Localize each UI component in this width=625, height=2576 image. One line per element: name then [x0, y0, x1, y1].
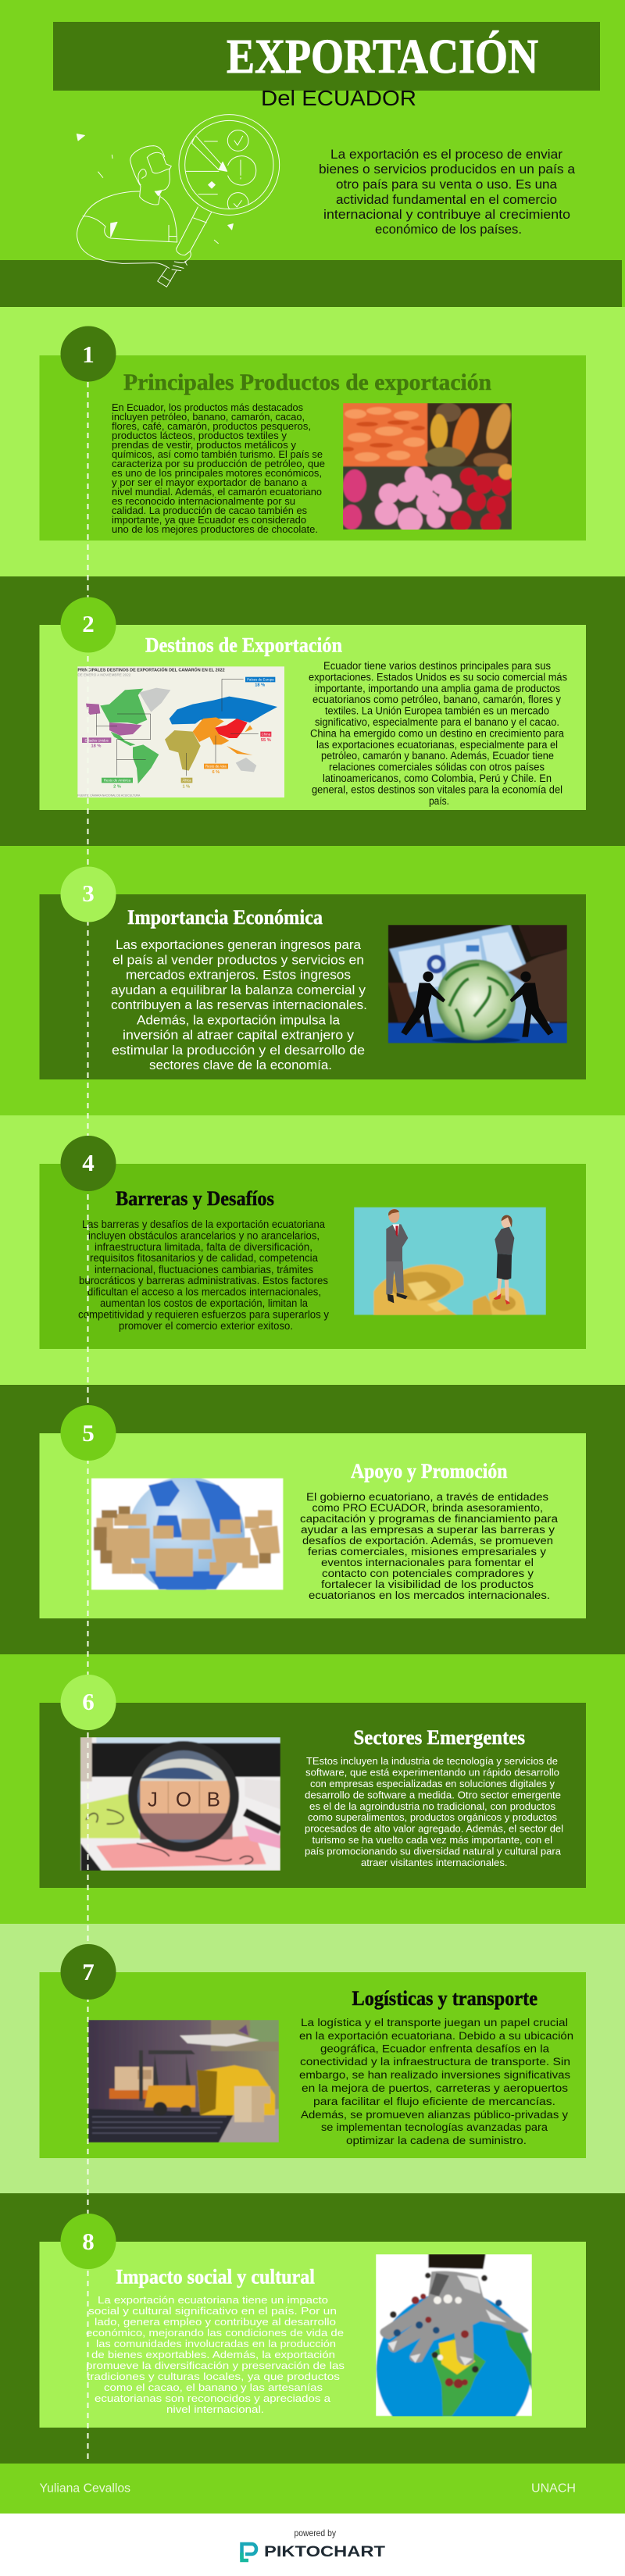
- body text 7: en la exportación ecuatoriana. Debido a su ubicación: [299, 2030, 573, 2042]
- body text 6: procesados de alto valor agregado. Además, el sector del: [305, 1823, 563, 1835]
- section 8 content: [86, 2254, 532, 2417]
- map: main export destinations: 18 %: [255, 683, 265, 688]
- background band: section 4: [0, 1115, 625, 1385]
- body text 6: país promocionando su diversidad natural y cultural para: [305, 1845, 562, 1857]
- body text 5: fortalecer la visibilidad de los productos: [321, 1579, 534, 1590]
- body text 3: inversión al atraer capital extranjero y: [123, 1029, 355, 1043]
- heading 7: Logísticas y transporte: [352, 1987, 538, 2010]
- section 2 content: [77, 634, 567, 807]
- body text 4: [78, 1218, 329, 1332]
- map: main export destinations: China: [262, 733, 271, 737]
- body text 2: significativo, especialmente para el banano y el cacao.: [315, 716, 559, 728]
- map: main export destinations: Resto de Asia: [205, 765, 227, 769]
- body text 5: eventos internacionales para fomentar el: [321, 1557, 534, 1568]
- body text 7: [299, 2017, 573, 2146]
- section 7 content: [88, 1987, 573, 2146]
- heading 3: Importancia Económica: [127, 906, 323, 929]
- body text 8: económico, mejorando las condiciones de vida de: [86, 2327, 344, 2339]
- panel 7: [39, 1972, 586, 2158]
- map: main export destinations: 2 %: [113, 784, 121, 789]
- image: globe with cardboard boxes: [91, 1476, 284, 1593]
- body text 7: Además, se promueven alianzas público-privadas y: [301, 2109, 568, 2121]
- body text 5: [300, 1491, 559, 1601]
- body text 8: social y cultural significativo en el país. Por un: [88, 2305, 337, 2317]
- body text 3: mercados extranjeros. Estos ingresos: [126, 969, 351, 983]
- badge 6: 6: [82, 1688, 95, 1715]
- body text 4: internacional, fluctuaciones cambiarias, trámites: [95, 1264, 313, 1276]
- body text 4: aumentan los costos de exportación, limitan la: [100, 1297, 308, 1309]
- body text 6: turismo se ha vuelto cada vez más importante, con el: [312, 1834, 552, 1846]
- body text 3: el país al vender productos y servicios en: [112, 953, 364, 967]
- body text 3: Las exportaciones generan ingresos para: [116, 938, 362, 952]
- heading 2: Destinos de Exportación: [145, 634, 342, 656]
- intro text: otro país para su venta o uso. Es una: [336, 177, 558, 192]
- footer institution: UNACH: [531, 2482, 576, 2495]
- background band: section 3: [0, 846, 625, 1115]
- body text 8: tradiciones y culturas locales, ya que productos: [87, 2371, 341, 2382]
- body text 2: latinoamericanos, como Colombia, Perú y Chile. En: [323, 772, 552, 784]
- title: EXPORTACIÓN: [227, 30, 538, 84]
- badge 8: 8: [82, 2228, 95, 2255]
- section 1 content: [112, 369, 516, 535]
- panel 8: [39, 2242, 586, 2428]
- body text 6: como superalimentos, productos orgánicos y productos: [308, 1811, 557, 1823]
- intro text: actividad fundamental en el comercio: [336, 192, 557, 207]
- body text 1: es uno de los principales motores económicos,: [112, 468, 322, 479]
- body text 8: [86, 2294, 345, 2415]
- image: JOB tiles under magnifying glass: B: [207, 1788, 220, 1811]
- section 5 content: [91, 1460, 559, 1601]
- body text 1: calidad. La producción de cacao también es: [112, 505, 307, 516]
- footer author: Yuliana Cevallos: [39, 2482, 130, 2495]
- body text 5: como PRO ECUADOR, brinda asesoramiento,: [312, 1502, 543, 1514]
- panel 1: [39, 355, 586, 541]
- body text 1: [112, 402, 325, 535]
- background band: footer: [0, 2464, 625, 2514]
- intro text: La exportación es el proceso de enviar: [330, 147, 562, 162]
- body text 8: lado, genera empleo y contribuye al desarrollo: [95, 2316, 336, 2328]
- body text 5: ayudar a las empresas a superar las barreras y: [301, 1524, 555, 1536]
- map: main export destinations: 55 %: [261, 738, 271, 743]
- body text 8: nivel internacional.: [166, 2403, 264, 2415]
- body text 4: competitividad y requieren esfuerzos para superarlos y: [78, 1309, 329, 1321]
- background band: section 7: [0, 1924, 625, 2193]
- heading 8: Impacto social y cultural: [116, 2265, 315, 2289]
- image: forklift, van and plane on a laptop: [88, 2020, 279, 2143]
- intro text: [319, 147, 576, 237]
- body text 1: En Ecuador, los productos más destacados: [112, 402, 303, 413]
- body text 3: [111, 938, 367, 1072]
- body text 2: importante, importando una amplia gama de productos: [315, 683, 560, 694]
- map: main export destinations: 6 %: [212, 770, 220, 775]
- heading 1: Principales Productos de exportación: [123, 369, 491, 395]
- body text 8: las comunidades involucradas en la producción: [96, 2338, 336, 2349]
- body text 6: TEstos incluyen la industria de tecnología y servicios de: [306, 1755, 558, 1767]
- background band: section 8: [0, 2193, 625, 2464]
- body text 7: para facilitar el flujo eficiente de mercancías.: [313, 2096, 555, 2107]
- map: main export destinations: FUENTE: CÁMARA NACIONAL DE ACUICULTURA: [77, 794, 141, 797]
- badge 7: 7: [82, 1958, 95, 1986]
- body text 8: promueve la diversificación y preservación de las: [86, 2360, 345, 2371]
- body text 1: importante, ya que Ecuador es considerado: [112, 515, 306, 526]
- panel 3: [39, 894, 586, 1079]
- map: main export destinations: Países de Europa: [247, 678, 274, 682]
- image: JOB tiles under magnifying glass: O: [176, 1788, 191, 1811]
- body text 7: se implementan tecnologías avanzadas para: [321, 2121, 548, 2133]
- timeline dashed line: [88, 382, 89, 2464]
- body text 7: conectividad y la infraestructura de transporte. Sin: [300, 2056, 570, 2068]
- map: main export destinations: [77, 666, 284, 797]
- body text 4: dificultan el acceso a los mercados internacionales,: [88, 1286, 321, 1298]
- background band: section 2: [0, 576, 625, 846]
- intro text: bienes o servicios producidos en un país a: [319, 162, 576, 177]
- body text 2: [309, 660, 567, 807]
- body text 2: ecuatorianos como petróleo, banano, camarón, flores y: [312, 694, 561, 705]
- body text 5: ferias comerciales, misiones empresariales y: [308, 1546, 546, 1557]
- body text 1: productos lácteos, productos textiles y: [112, 430, 288, 441]
- image: figures pushing a money sphere: [388, 925, 567, 1044]
- body text 3: estimular la producción y el desarrollo de: [112, 1044, 365, 1058]
- body text 6: es el de la agroindustria no tradicional, con productos: [309, 1800, 556, 1812]
- body text 1: es reconocido internacionalmente por su: [112, 496, 295, 507]
- badge 2: [61, 597, 116, 653]
- body text 8: como el cacao, el banano y las artesanías: [104, 2382, 323, 2393]
- body text 7: optimizar la cadena de suministro.: [346, 2135, 527, 2146]
- map: main export destinations: DE ENERO A NOVIEMBRE 2022: [77, 673, 131, 677]
- body text 1: caracteriza por su producción de petróleo, que: [112, 458, 325, 469]
- panel 2: [39, 625, 586, 810]
- body text 1: químicos, así como también turismo. El país se: [112, 449, 323, 460]
- body text 1: prendas de vestir, productos metálicos y: [112, 440, 297, 451]
- body text 7: geográfica, Ecuador enfrenta desafíos en la: [320, 2043, 550, 2054]
- heading 5: Apoyo y Promoción: [351, 1460, 508, 1482]
- body text 2: exportaciones. Estados Unidos es su socio comercial más: [309, 671, 567, 683]
- badge 1: 1: [82, 341, 95, 368]
- section 3 content: [111, 906, 567, 1072]
- body text 2: general, estos destinos son vitales para la economía del: [312, 783, 562, 795]
- image: JOB tiles under magnifying glass: J: [148, 1788, 158, 1811]
- body text 1: incluyen petróleo, banano, camarón, cacao,: [112, 412, 305, 423]
- intro text: internacional y contribuye al crecimiento: [323, 207, 570, 222]
- powered by label: powered by: [294, 2528, 336, 2539]
- heading 4: Barreras y Desafíos: [116, 1187, 274, 1210]
- panel 4: [39, 1164, 586, 1349]
- background band: section 6: [0, 1654, 625, 1924]
- body text 3: ayudan a equilibrar la balanza comercial y: [111, 983, 366, 997]
- title banner: [53, 22, 600, 91]
- body text 5: capacitación y programas de financiamiento para: [300, 1513, 559, 1525]
- body text 4: promover el comercio exterior exitoso.: [119, 1320, 293, 1332]
- body text 6: software, que está experimentando un rápido desarrollo: [305, 1766, 559, 1778]
- image: shrimp, cacao and flowers collage: [341, 401, 516, 533]
- badge 1: [61, 326, 116, 381]
- badge 2: 2: [82, 610, 95, 637]
- body text 8: ecuatorianas son reconocidos y apreciados a: [95, 2392, 331, 2404]
- body text 2: China ha emergido como un destino en crecimiento para: [310, 727, 564, 739]
- body text 1: y por ser el mayor exportador de banano a: [112, 477, 307, 488]
- heading 6: Sectores Emergentes: [353, 1726, 525, 1749]
- body text 7: en la mejora de puertos, carreteras y aeropuertos: [302, 2082, 568, 2094]
- body text 1: nivel mundial. Además, el camarón ecuatoriano: [112, 487, 322, 498]
- body text 2: relaciones comerciales sólidas con otros países: [329, 762, 545, 773]
- body text 1: flores, café, camarón, productos pesqueros,: [112, 421, 311, 432]
- body text 8: de bienes exportables. Además, la exportación: [91, 2349, 335, 2360]
- body text 6: desarrollo de software a medida. Otro sector emergente: [305, 1789, 561, 1800]
- map: main export destinations: PRINCIPALES DESTINOS DE EXPORTACIÓN DEL CAMARÓN EN EL 2022: [77, 666, 225, 673]
- image: business people on split coin: [354, 1207, 546, 1318]
- badge 4: 4: [82, 1149, 95, 1176]
- background band: header: [0, 0, 625, 307]
- body text 3: sectores clave de la economía.: [149, 1058, 332, 1072]
- body text 2: petróleo, camarón y banano. Además, Ecuador tiene: [321, 750, 554, 762]
- body text 5: ecuatorianos en los mercados internacionales.: [309, 1589, 550, 1601]
- map: main export destinations: 18 %: [91, 744, 101, 748]
- background band: Piktochart credit: [0, 2514, 625, 2576]
- body text 7: embargo, se han realizado inversiones significativas: [299, 2069, 570, 2081]
- map: main export destinations: Resto de América: [104, 779, 131, 783]
- body text 8: La exportación ecuatoriana tiene un impacto: [98, 2294, 328, 2306]
- badge 8: [61, 2214, 116, 2269]
- badge 3: 3: [82, 879, 95, 907]
- badge 5: [61, 1405, 116, 1461]
- badge 3: [61, 867, 116, 922]
- body text 5: desafíos de exportación. Además, se promueven: [302, 1535, 553, 1547]
- body text 2: las exportaciones ecuatorianas, especialmente para el: [316, 739, 558, 751]
- body text 6: con empresas especializadas en soluciones digitales y: [310, 1778, 555, 1789]
- image: hand over globe with people: [376, 2254, 532, 2417]
- body text 6: atraer visitantes internacionales.: [361, 1857, 508, 1868]
- body text 4: incluyen obstáculos arancelarios y no arancelarios,: [88, 1229, 320, 1241]
- body text 4: requisitos fitosanitarios y de calidad, competencia: [90, 1252, 318, 1264]
- panel 6: [39, 1703, 586, 1888]
- body text 4: infraestructura limitada, falta de diversificación,: [95, 1241, 312, 1253]
- badge 7: [61, 1944, 116, 2000]
- Piktochart wordmark: PIKTOCHART: [264, 2543, 385, 2560]
- panel 5: [39, 1433, 586, 1618]
- body text 5: El gobierno ecuatoriano, a través de entidades: [306, 1491, 548, 1503]
- body text 6: [305, 1755, 563, 1868]
- background band: section 5: [0, 1385, 625, 1654]
- body text 3: contribuyen a las reservas internacionales.: [111, 998, 367, 1012]
- body text 5: contacto con potenciales compradores y: [322, 1568, 534, 1579]
- section 4 content: [78, 1187, 546, 1332]
- body text 2: Ecuador tiene varios destinos principales para sus: [323, 660, 551, 672]
- intro text: económico de los países.: [375, 222, 522, 237]
- body text 4: Las barreras y desafíos de la exportación ecuatoriana: [82, 1218, 325, 1230]
- map: main export destinations: 1 %: [182, 784, 190, 789]
- subtitle: Del ECUADOR: [261, 86, 416, 110]
- map: main export destinations: África: [182, 779, 191, 783]
- badge 4: [61, 1136, 116, 1191]
- illustration: man with magnifying glass: [77, 115, 280, 287]
- section 6 content: [80, 1726, 563, 1871]
- image: JOB tiles under magnifying glass: [80, 1737, 280, 1871]
- badge 6: [61, 1675, 116, 1730]
- badge 5: 5: [82, 1419, 95, 1447]
- body text 2: país.: [429, 795, 449, 807]
- dark strip under header: [0, 260, 622, 307]
- background band: section 1: [0, 307, 625, 576]
- Piktochart logo mark: [242, 2544, 256, 2560]
- body text 7: La logística y el transporte juegan un papel crucial: [301, 2017, 568, 2028]
- body text 1: uno de los mejores productores de chocolate.: [112, 524, 318, 535]
- body text 3: Además, la exportación impulsa la: [137, 1013, 341, 1027]
- map: main export destinations: Estados Unidos: [85, 738, 109, 742]
- body text 4: burocráticos y barreras administrativas. Estos factores: [79, 1275, 328, 1286]
- body text 2: textiles. La Unión Europea también es un mercado: [325, 705, 549, 717]
